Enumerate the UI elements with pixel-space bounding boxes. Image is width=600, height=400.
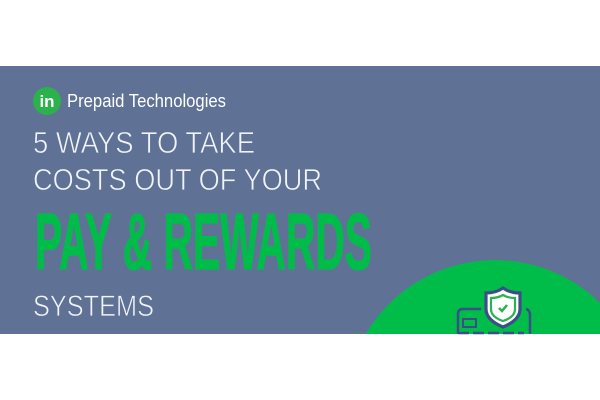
- icon: logo badge: in: [39, 92, 55, 111]
- shield: [486, 288, 520, 327]
- title line 1: 5 WAYS TO TAKE: [33, 125, 255, 160]
- brand name: Prepaid Technologies: [67, 91, 226, 111]
- icon: logo badge: [33, 87, 61, 115]
- panel: slate background: [0, 66, 600, 334]
- green circle: [366, 260, 600, 334]
- title: [33, 125, 372, 323]
- green circle with icon: [366, 260, 600, 334]
- title line 4: SYSTEMS: [33, 290, 154, 323]
- logo: [33, 87, 226, 115]
- icon: card with shield: [458, 288, 530, 334]
- card outline: [458, 309, 530, 334]
- title line 2: COSTS OUT OF YOUR: [33, 162, 322, 197]
